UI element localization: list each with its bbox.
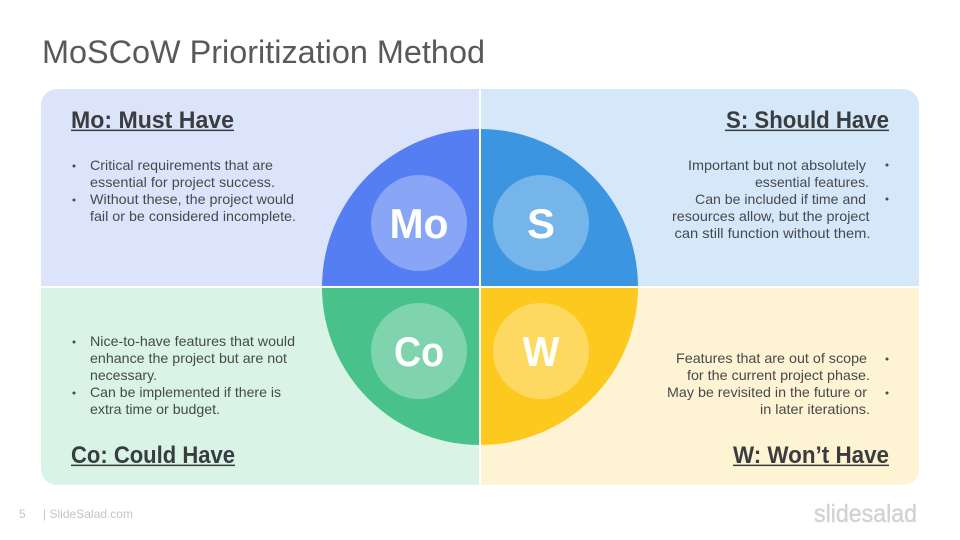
panel: Could Have text [71,333,295,469]
panel: Must Have text [71,107,296,224]
quadrant: Co [322,288,479,445]
bullets: Won't Have: in later iterations. [760,401,870,417]
bullets: Must Have: Critical requirements that are [90,157,273,173]
footer: page number and site: 5 [19,507,26,521]
title: MoSCoW Prioritization Method [42,34,485,70]
bullets: Should Have: essential features. [755,174,869,190]
bullets: Won't Have: Features that are out of scope [676,350,867,366]
logo: slidesalad: slidesalad [814,500,917,528]
bullets: Should Have: can still function without them. [674,225,870,241]
bullets: Must Have [72,157,296,224]
panel backgrounds [41,89,919,485]
bullets: Could Have: necessary. [90,367,157,383]
quadrant: S: S [527,200,555,247]
bullets: Must Have: Without these, the project would [90,191,294,207]
bullets: Won't Have: May be revisited in the future or [667,384,867,400]
quadrant: Mo [322,129,479,286]
heading: Co Could Have: Co: Could Have [71,442,235,469]
bullets: Could Have: Can be implemented if there is [90,384,281,400]
bullets: Won't Have: for the current project phase. [687,367,870,383]
panel: Won't Have text [667,350,889,469]
quadrant: S [481,129,638,286]
panel: Should Have text [672,107,889,241]
bullets: Could Have [72,333,295,417]
circle diagram [322,129,638,445]
white divider cross [41,89,919,485]
quadrant: Mo: Mo [390,200,448,247]
bullets: Must Have: essential for project success. [90,174,275,190]
heading: S Should Have: S: Should Have [726,107,889,134]
bullets: Should Have: resources allow, but the project [672,208,870,224]
bullets: Should Have: Can be included if time and [695,191,866,207]
bullets: Should Have: Important but not absolutely [688,157,866,173]
bullets: Could Have: enhance the project but are not [90,350,287,366]
heading: Mo Must Have: Mo: Must Have [71,107,234,134]
quadrant: W [481,288,638,445]
bullets: Could Have: extra time or budget. [90,401,220,417]
bullets: Must Have: fail or be considered incomplete. [90,208,296,224]
bullets: Won't Have [667,350,888,417]
footer: page number and site: | SlideSalad.com [43,507,133,521]
bullets: Should Have [672,157,888,241]
quadrant: W: W [522,328,560,375]
heading: W Won't Have: W: Won’t Have [733,442,889,469]
bullets: Could Have: Nice-to-have features that would [90,333,295,349]
quadrant: Co: Co [394,328,444,375]
